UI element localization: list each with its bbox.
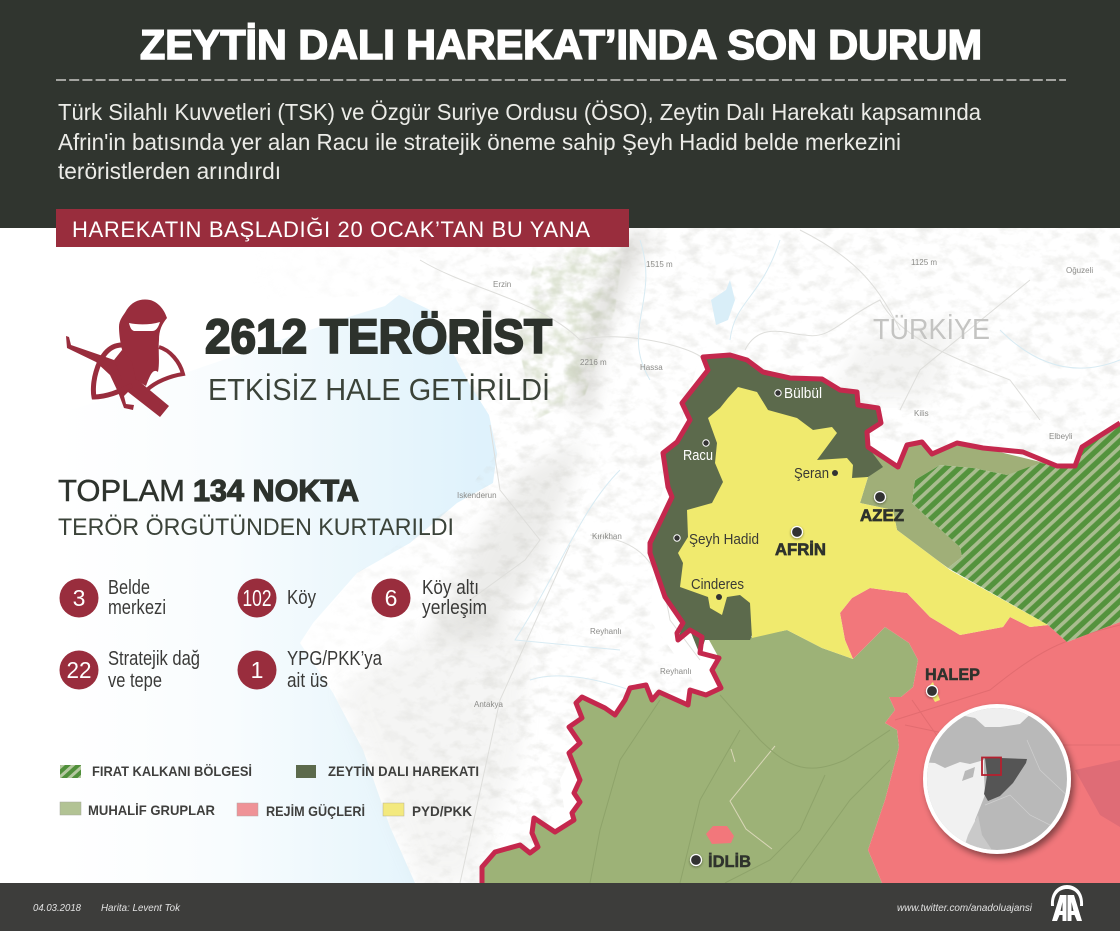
- place labels on base map: Reyhanlı: [590, 627, 622, 636]
- region: regime forces: [840, 588, 1120, 883]
- footer url: www.twitter.com/anadoluajansi: [897, 903, 1033, 914]
- stat: 102 villages: 102: [242, 585, 272, 611]
- place labels on base map: Salqin: [627, 779, 649, 788]
- sea: [239, 295, 497, 883]
- place labels on base map: Antakya: [474, 700, 503, 709]
- heading: total 134 points: 134 NOKTA: [193, 473, 359, 508]
- stat: 3 town centres: Belde: [108, 577, 150, 599]
- place labels on base map: Oğuzeli: [1066, 266, 1093, 275]
- stat: 6 hamlets: [372, 577, 487, 619]
- place labels on base map: Elbeyli: [1049, 432, 1073, 441]
- footer date: 04.03.2018: [33, 903, 81, 914]
- banner: since start of operation: HAREKATIN BAŞLADIĞI 20 OCAK’TAN BU YANA: [72, 217, 590, 242]
- label: Türkiye: TÜRKİYE: [873, 313, 990, 346]
- icon: AA logo: [1051, 885, 1083, 921]
- intro text: teröristlerden arındırdı: [58, 158, 281, 184]
- legend: opposition: MUHALİF GRUPLAR: [88, 802, 215, 818]
- lake: [711, 280, 735, 325]
- stat: 2612 terrorists: 2612 TERÖRİST: [205, 311, 552, 364]
- icon: masked militant with rifle: [66, 299, 183, 417]
- map city: Idlib: [688, 852, 750, 868]
- map city: Azez: AZEZ: [860, 506, 904, 525]
- stat: 22 strategic hills: Stratejik dağ: [108, 648, 200, 670]
- stat: 102 villages: [238, 578, 316, 618]
- stat: 6 hamlets: yerleşim: [422, 597, 487, 619]
- map city: Şeyh Hadid: [673, 533, 758, 547]
- place labels on base map: Kilis: [914, 409, 929, 418]
- map city: Halep: [925, 665, 980, 696]
- intro text: Türk Silahlı Kuvvetleri (TSK) ve Özgür Suriye Ordusu (ÖSO), Zeytin Dalı Harekatı kapsamında: [58, 99, 981, 125]
- place labels on base map: As Safirah: [1079, 791, 1116, 800]
- map city: Şeyh Hadid: Şeyh Hadid: [689, 532, 759, 548]
- legend: Olive Branch: ZEYTİN DALI HAREKATI: [328, 763, 479, 779]
- stat: 22 strategic hills: ve tepe: [108, 670, 162, 692]
- stats list: [60, 577, 487, 692]
- heading: total 134 points: TOPLAM: [58, 473, 185, 508]
- stat: 1 YPG/PKK base: [238, 648, 383, 692]
- place labels on base map: 2216 m: [580, 358, 607, 367]
- base map: [239, 228, 1120, 883]
- stat: 22 strategic hills: 22: [66, 657, 92, 683]
- legend: PYD/PKK: [383, 803, 472, 819]
- subheading: TERÖR ÖRGÜTÜNDEN KURTARILDI: [58, 514, 454, 541]
- place labels on base map: Erzin: [493, 280, 511, 289]
- place labels on base map: 1515 m: [646, 260, 673, 269]
- legend: PYD/PKK: PYD/PKK: [412, 803, 472, 819]
- region: azez opposition strip: [860, 442, 1060, 568]
- footer credit: Harita: Levent Tok: [101, 903, 181, 914]
- banner: since start of operation: [56, 209, 629, 247]
- stat: 3 town centres: 3: [73, 585, 85, 611]
- map city: Cinderes: [691, 577, 744, 600]
- region: PYD/PKK: [678, 387, 1048, 659]
- place labels on base map: Kırıkhan: [592, 532, 622, 541]
- stat: 3 town centres: merkezi: [108, 597, 166, 619]
- heading: total 134 points: [58, 473, 359, 508]
- stat: 22 strategic hills: [60, 648, 200, 692]
- region: Olive Branch operation area: [650, 355, 883, 655]
- place labels on base map: [458, 259, 1093, 708]
- stat: 102 villages: Köy: [287, 587, 316, 609]
- map city: Afrin: [775, 526, 826, 559]
- region: opposition groups: [482, 627, 918, 883]
- stat: 1 YPG/PKK base: YPG/PKK’ya: [287, 648, 383, 670]
- place labels on base map: Hassa: [640, 363, 663, 372]
- place labels on base map: Reyhanlı: [660, 667, 692, 676]
- map city: Idlib: İDLİB: [708, 852, 751, 871]
- legend: regime: REJİM GÜÇLERİ: [266, 803, 365, 819]
- legend: Euphrates Shield: FIRAT KALKANI BÖLGESİ: [92, 763, 252, 779]
- stat: 3 town centres: [60, 577, 166, 619]
- map city: Afrin: AFRİN: [775, 540, 826, 559]
- map city: Azez: [860, 492, 904, 525]
- place labels on base map: Iskenderun: [457, 491, 497, 500]
- legend: [60, 763, 479, 819]
- map city: Racu: Racu: [683, 448, 713, 464]
- region: Euphrates Shield: [912, 423, 1120, 642]
- inset locator map: [920, 700, 1075, 860]
- stat caption: ETKİSİZ HALE GETİRİLDİ: [208, 372, 550, 407]
- map city: Halep: HALEP: [925, 665, 980, 684]
- stat: 1 YPG/PKK base: 1: [251, 657, 263, 683]
- intro text: [58, 99, 981, 184]
- stat: 6 hamlets: Köy altı: [422, 577, 479, 599]
- border line: [482, 355, 1120, 887]
- header background: [0, 0, 1120, 228]
- map city: Bülbül: [774, 387, 822, 398]
- roads and rivers: [420, 230, 1040, 883]
- map city: Şeran: Şeran: [794, 466, 829, 482]
- place labels on base map: Idlib: [691, 873, 706, 882]
- map city: Cinderes: Cinderes: [691, 577, 744, 593]
- footer: [0, 883, 1120, 931]
- title: ZEYTİN DALI HAREKAT’INDA SON DURUM: [140, 21, 982, 68]
- map city: Racu: [684, 439, 712, 460]
- place labels on base map: Ad Dana: [752, 706, 784, 715]
- stat: 1 YPG/PKK base: ait üs: [287, 670, 328, 692]
- place labels on base map: 1125 m: [911, 258, 937, 267]
- map city: Bülbül: Bülbül: [784, 386, 822, 402]
- terrain texture: [368, 228, 1120, 883]
- stat: 6 hamlets: 6: [385, 585, 397, 611]
- intro text: Afrin'in batısında yer alan Racu ile stratejik öneme sahip Şeyh Hadid belde merkezini: [58, 129, 901, 155]
